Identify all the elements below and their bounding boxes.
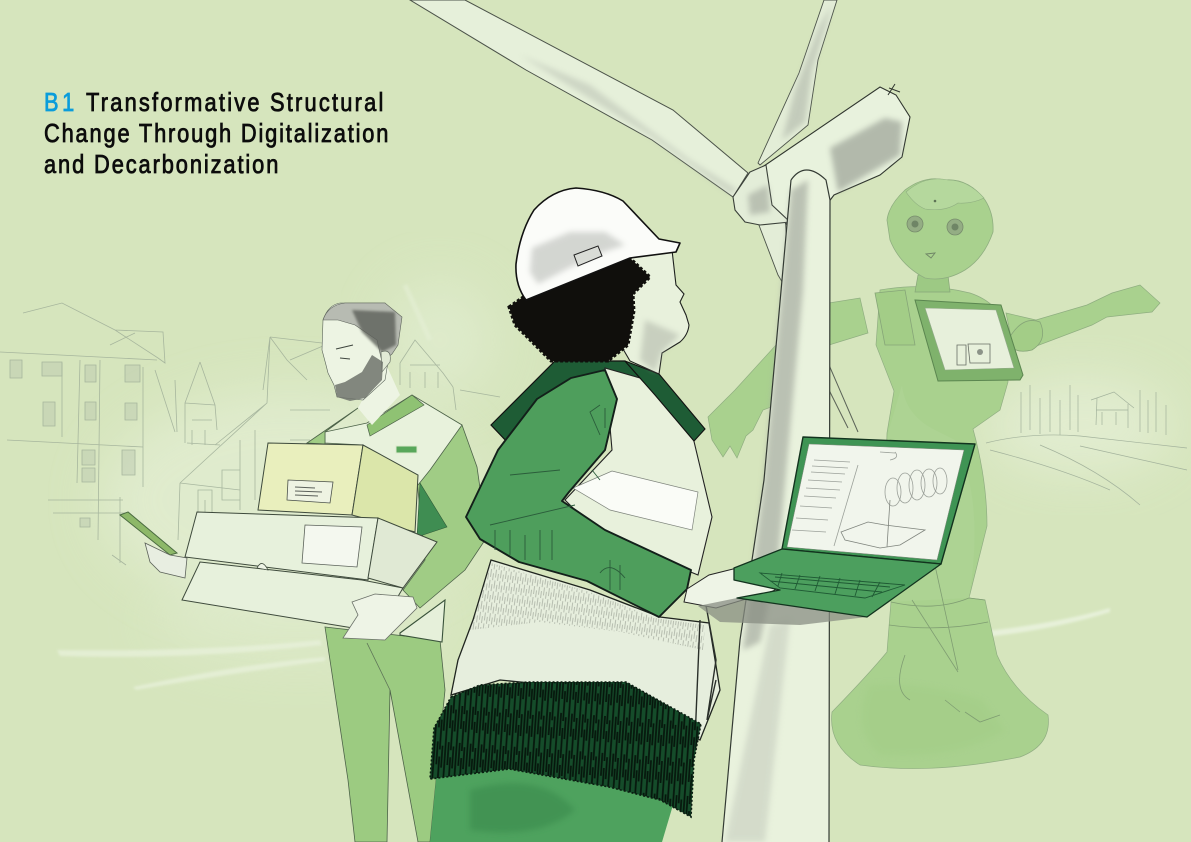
turbine: long blade: [410, 0, 748, 197]
engineer: vest collar on the chest: [625, 361, 705, 441]
robot: lighter front panel: [884, 385, 975, 602]
box: handle cut-out: [257, 563, 268, 570]
robot: head: [887, 179, 993, 279]
title: line three: and Decarbonization: [44, 150, 278, 179]
robot: waist and body lines: [889, 520, 1000, 722]
box: middle front: [185, 512, 378, 580]
worker: beard: [335, 355, 383, 401]
box: top label: [287, 480, 333, 503]
engineer: face and neck: [612, 250, 689, 374]
turbine: third blade behind tower: [757, 215, 790, 295]
box: bottom: [182, 562, 403, 628]
title: line two: Change Through Digitalization: [44, 119, 388, 148]
engineer: lower vest: [451, 560, 720, 740]
turbine: hub: [733, 165, 790, 225]
engineer: hard hat: [516, 188, 680, 300]
worker: face: [322, 303, 390, 400]
box: top front: [258, 443, 363, 515]
sketch: town behind delivery worker: [0, 303, 500, 565]
worker: trousers: [325, 627, 445, 842]
turbine: upright blade shading: [782, 5, 832, 140]
turbine: anemometer: [888, 84, 900, 95]
box: middle label: [302, 525, 362, 567]
robot: body and base: [832, 287, 1048, 769]
worker: name badge: [396, 446, 417, 453]
worker: phone: [120, 512, 177, 555]
engineer: fringe belt: [430, 682, 701, 817]
robot: shoulder joints: [875, 290, 1043, 351]
turbine: tower outline: [722, 170, 830, 842]
engineer: hand on laptop: [684, 568, 782, 608]
engineer: hard hat shading: [530, 232, 625, 284]
worker: trouser crease: [367, 643, 390, 690]
turbine: tower shading: [743, 180, 808, 650]
turbine: hub shading: [748, 185, 770, 215]
worker: under-arm shadow: [417, 483, 447, 537]
engineer: white reflective stripe: [573, 471, 698, 530]
laptop: base: [734, 549, 941, 617]
robot: base shading: [862, 684, 1005, 756]
turbine: tower: [722, 170, 830, 842]
engineer in hard hat: [430, 188, 782, 842]
worker: collar: [367, 395, 424, 436]
engineer: grey shaded vest band: [470, 563, 705, 650]
turbine: nacelle shading: [830, 118, 902, 192]
robot: extended arm: [1006, 285, 1160, 350]
laptop: screen: [787, 444, 964, 560]
pale chalk haze behind the scene: [57, 280, 1175, 690]
engineer: vest light panel: [565, 368, 712, 575]
robot: [708, 179, 1160, 769]
worker: ear: [381, 351, 390, 372]
robot: head crown panel: [906, 179, 984, 210]
delivery worker: [120, 303, 487, 842]
title: [44, 88, 388, 179]
worker: eye and brow: [336, 345, 353, 359]
engineer: hard hat badge: [574, 246, 602, 266]
engineer: harness straps: [695, 600, 716, 740]
robot: far arm and hand: [708, 298, 868, 458]
turbine: long blade shading: [520, 55, 738, 194]
robot: neck: [915, 275, 950, 292]
laptop: shadow under base: [698, 598, 867, 625]
title: line one: Transformative Structural: [86, 88, 383, 117]
engineer: sleeve sketch lines: [490, 405, 625, 590]
worker: hair: [323, 303, 402, 362]
engineer: trousers: [430, 760, 673, 842]
laptop: screen diagram: [792, 452, 947, 548]
sketch: village on the right: [986, 385, 1187, 505]
engineer: sleeve: [466, 370, 691, 617]
turbine: nacelle: [758, 87, 910, 240]
robot: tablet: [915, 300, 1023, 381]
box: top side: [352, 445, 418, 532]
engineer: hair: [509, 258, 650, 361]
turbine: lower blade lines right of tower: [829, 365, 858, 432]
worker: hand with phone: [145, 543, 187, 578]
box: lowest rear: [400, 600, 445, 642]
wind turbine: [410, 0, 910, 842]
engineer: jaw shading: [640, 320, 680, 372]
robot: eyes and mouth: [907, 200, 963, 258]
worker: jacket light front: [325, 395, 462, 485]
laptop: lid: [782, 437, 975, 564]
worker: jacket sleeve: [403, 403, 487, 608]
engineer: earring: [637, 308, 643, 314]
worker: supporting hand: [343, 594, 417, 640]
worker: neck: [358, 362, 400, 425]
turbine: upright blade: [758, 0, 837, 165]
worker: jacket left shoulder: [307, 408, 358, 444]
laptop: [698, 437, 975, 625]
title: section code: B 1: [44, 88, 74, 117]
box: middle side: [368, 518, 437, 588]
laptop: keyboard: [760, 573, 905, 598]
engineer: vest collar on the back: [491, 361, 640, 445]
